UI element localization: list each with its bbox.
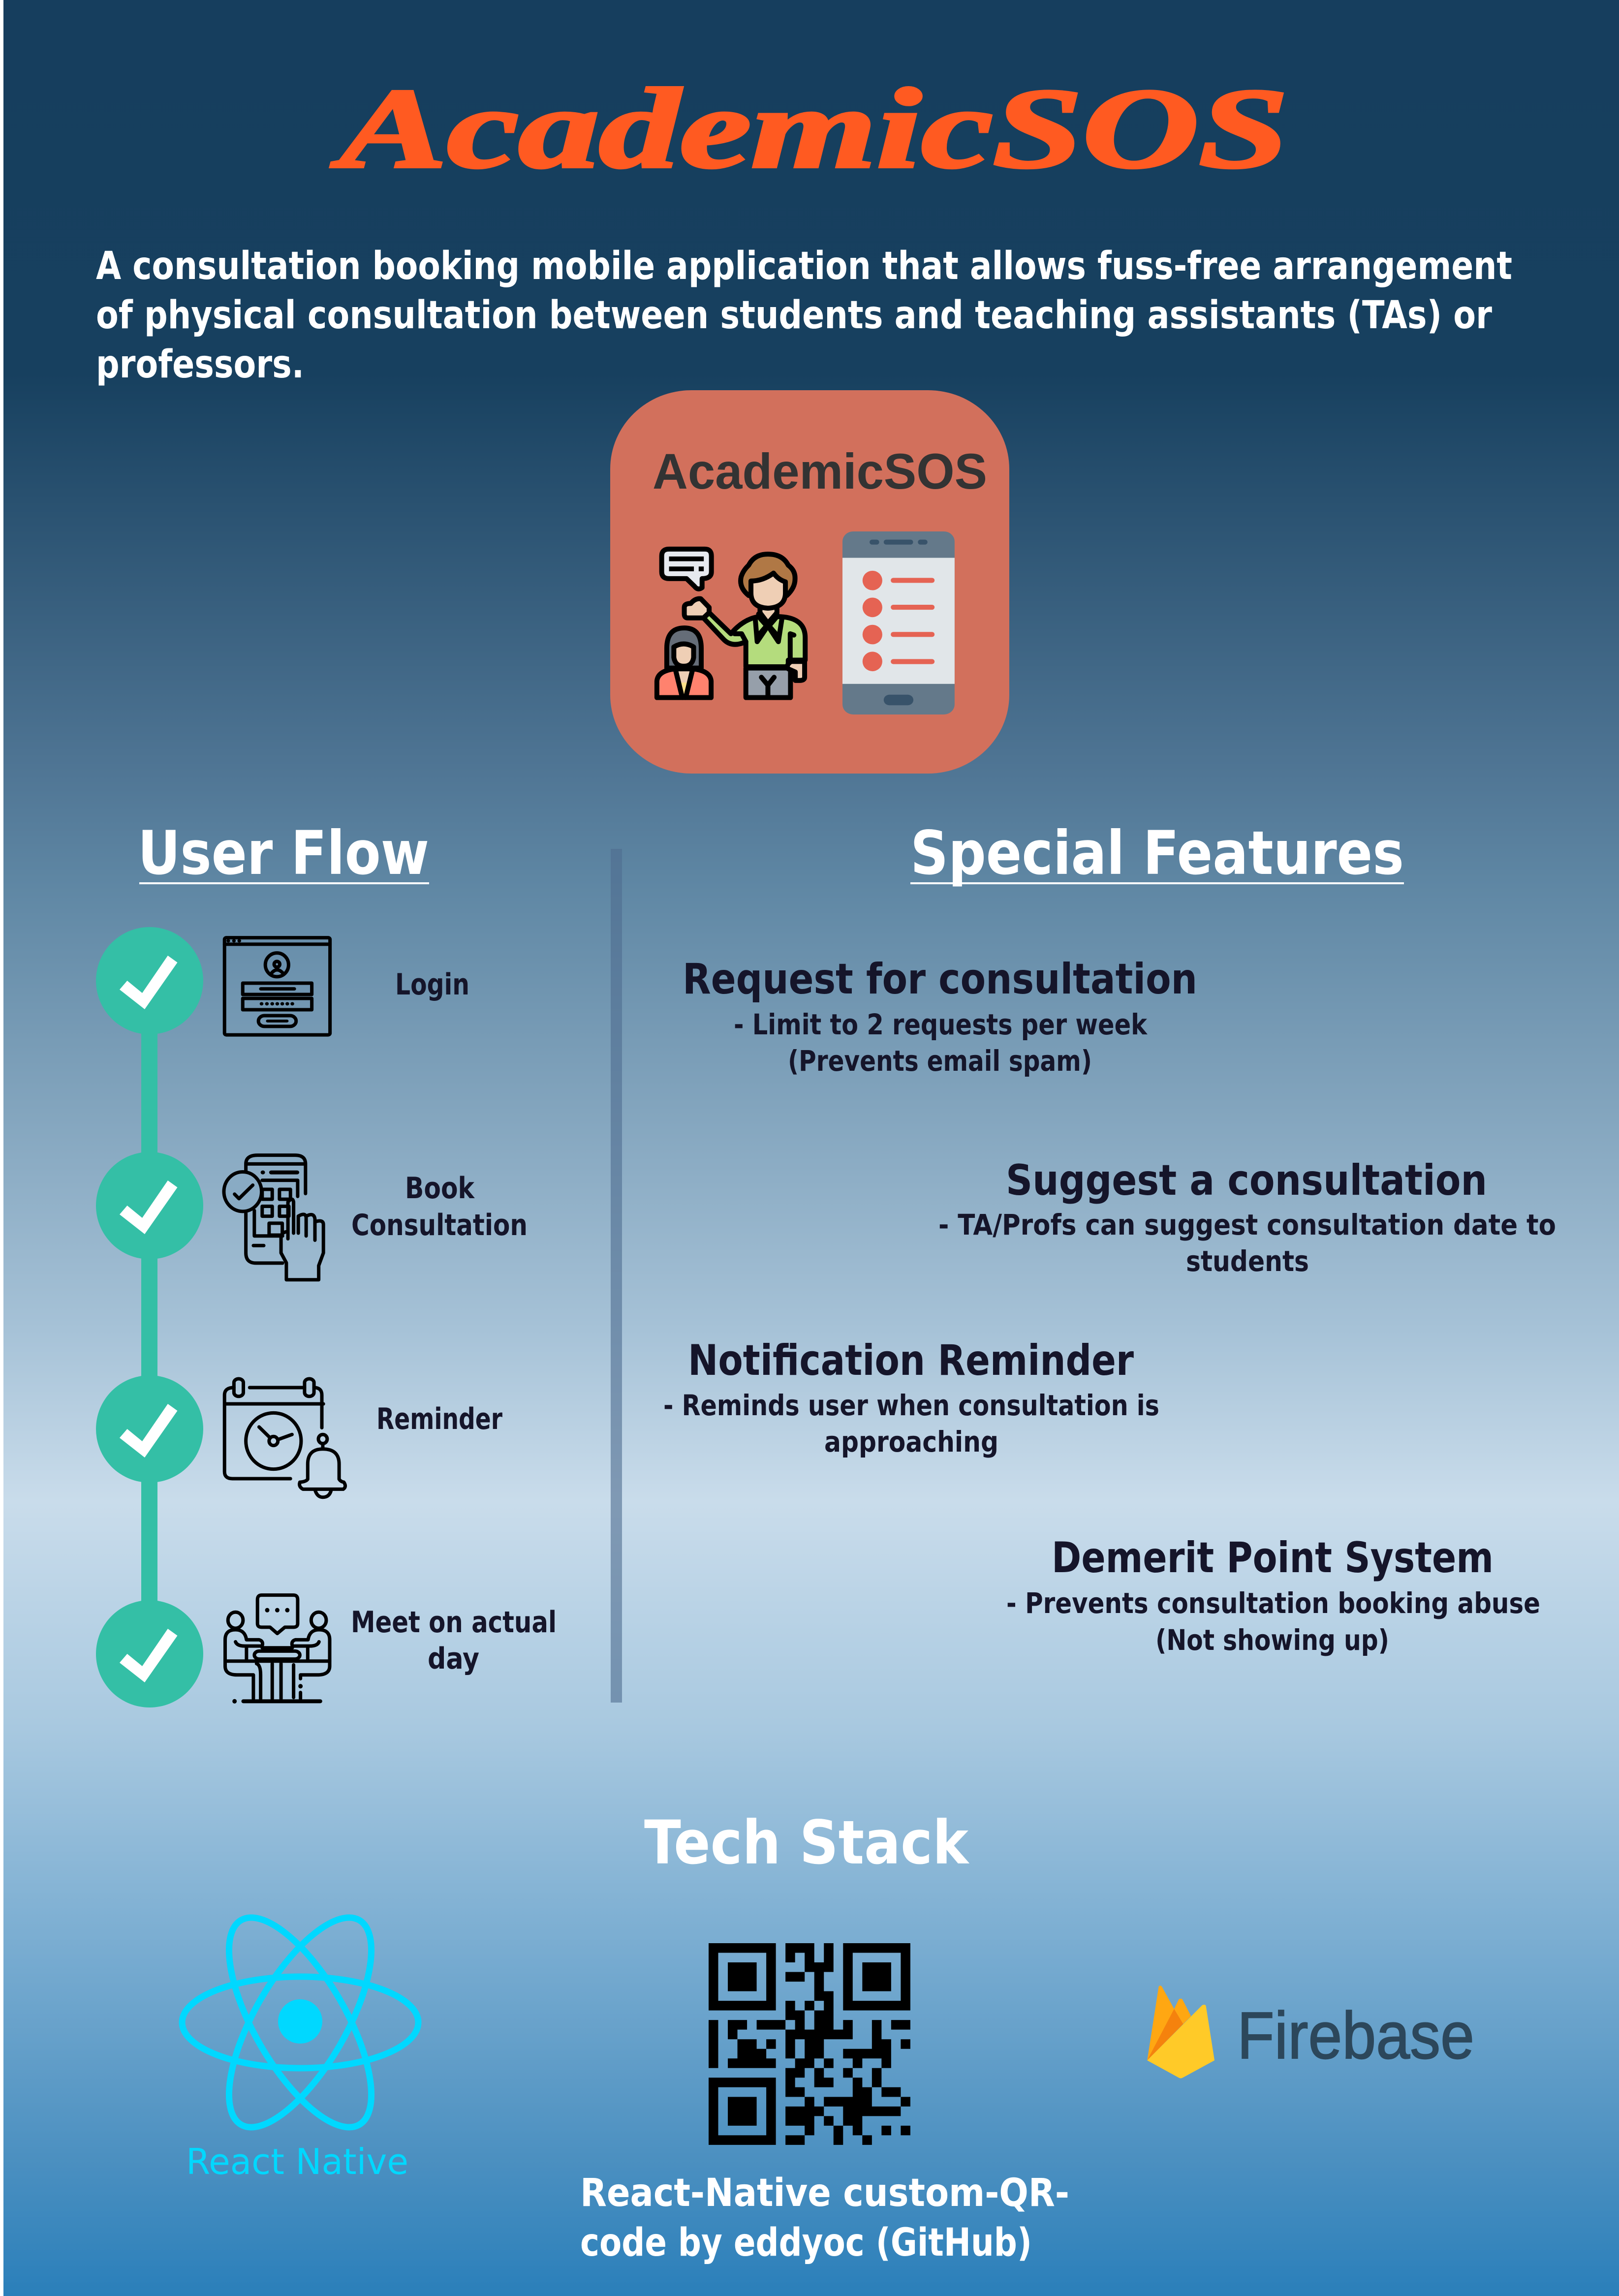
icon: phone checklist bbox=[842, 531, 955, 714]
icon: meeting at table bbox=[225, 1595, 330, 1704]
logo: firebase: Firebase bbox=[1237, 1998, 1474, 2073]
description text: professors. bbox=[96, 342, 304, 387]
feature: suggest a consultation: - TA/Profs can suggest consultation date to bbox=[938, 1208, 1556, 1241]
label: book consultation bbox=[351, 1171, 528, 1242]
feature: demerit point system: Demerit Point System bbox=[1052, 1533, 1494, 1582]
label: book consultation: Consultation bbox=[351, 1208, 528, 1242]
step 4 marker bbox=[96, 1600, 203, 1707]
feature: notification reminder: - Reminds user when consultation is bbox=[663, 1389, 1159, 1422]
feature: request for consultation: Request for consultation bbox=[683, 955, 1197, 1004]
feature: notification reminder bbox=[663, 1336, 1159, 1458]
feature: request for consultation: - Limit to 2 requests per week bbox=[734, 1008, 1148, 1041]
heading: special features: Special Features bbox=[910, 818, 1404, 888]
step 3 marker bbox=[96, 1375, 203, 1483]
icon: teacher and student bbox=[657, 549, 805, 698]
user flow timeline bbox=[96, 927, 203, 1707]
label: meet on actual day: Meet on actual bbox=[351, 1605, 557, 1640]
feature: notification reminder: approaching bbox=[824, 1425, 998, 1458]
label: reminder: Reminder bbox=[376, 1402, 502, 1436]
icon: login window bbox=[224, 938, 330, 1035]
description text bbox=[96, 244, 1512, 387]
step 2 marker bbox=[96, 1152, 203, 1259]
feature: demerit point system: (Not showing up) bbox=[1155, 1623, 1389, 1657]
QR caption: React-Native custom-QR- bbox=[580, 2171, 1069, 2215]
logo: react native bbox=[182, 1897, 418, 2182]
heading: user flow: User Flow bbox=[138, 818, 429, 888]
feature: request for consultation bbox=[683, 955, 1197, 1078]
icon: calendar reminder bell bbox=[224, 1379, 345, 1497]
logo: react native: React Native bbox=[186, 2141, 408, 2182]
divider bbox=[611, 849, 622, 1703]
feature: notification reminder: Notification Reminder bbox=[688, 1336, 1134, 1385]
app icon name: AcademicSOS bbox=[653, 443, 987, 499]
feature: demerit point system bbox=[1006, 1533, 1540, 1657]
label: login: Login bbox=[395, 967, 469, 1002]
feature: suggest a consultation: students bbox=[1186, 1244, 1309, 1278]
title: AcademicSOS bbox=[331, 65, 1288, 192]
feature: suggest a consultation: Suggest a consultation bbox=[1006, 1156, 1487, 1205]
feature: demerit point system: - Prevents consultation booking abuse bbox=[1006, 1586, 1540, 1620]
step 1 marker bbox=[96, 927, 203, 1034]
label: meet on actual day bbox=[351, 1605, 557, 1676]
icon: firebase flame bbox=[1147, 1986, 1214, 2079]
feature: request for consultation: (Prevents email spam) bbox=[788, 1044, 1092, 1078]
label: meet on actual day: day bbox=[428, 1642, 479, 1676]
feature: suggest a consultation bbox=[938, 1156, 1556, 1278]
QR caption: code by eddyoc (GitHub) bbox=[580, 2221, 1032, 2265]
QR caption bbox=[580, 2171, 1069, 2265]
heading: tech stack: Tech Stack bbox=[644, 1808, 970, 1878]
label: book consultation: Book bbox=[405, 1171, 475, 1206]
logo: firebase bbox=[1147, 1986, 1474, 2079]
app icon bbox=[610, 390, 1009, 774]
QR code bbox=[709, 1943, 910, 2145]
icon: booking on phone bbox=[224, 1155, 323, 1280]
